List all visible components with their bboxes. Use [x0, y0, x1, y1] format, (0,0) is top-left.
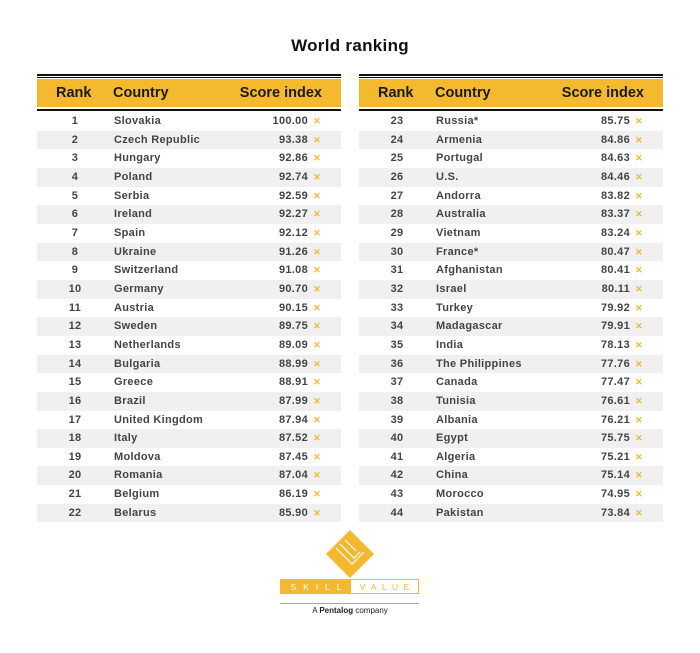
rows 23-44: 26	[391, 171, 403, 183]
rows 23-44: 84.46	[601, 171, 630, 183]
rows 23-44: Australia	[436, 208, 486, 220]
rows 1-22: Moldova	[114, 451, 161, 463]
rows 23-44: 75.21	[601, 451, 630, 463]
rows 1-22: Czech Republic	[114, 134, 200, 146]
panel: left ranking table	[37, 74, 341, 522]
rows 23-44: 79.91	[601, 320, 630, 332]
rows 1-22: ✕	[313, 303, 321, 313]
rows 23-44: 40	[391, 432, 403, 444]
rows 1-22: 13	[69, 339, 81, 351]
rows 23-44: 76.21	[601, 414, 630, 426]
rows 23-44: ✕	[635, 228, 643, 238]
rows 23-44: ✕	[635, 172, 643, 182]
rows 1-22: 20	[69, 469, 81, 481]
rows 23-44: Armenia	[436, 134, 482, 146]
table header	[359, 79, 663, 107]
wordmark bar	[280, 579, 419, 594]
rows 1-22: 86.19	[279, 488, 308, 500]
rows 1-22: ✕	[313, 489, 321, 499]
rows 1-22: ✕	[313, 247, 321, 257]
rows 23-44: 84.86	[601, 134, 630, 146]
rows 23-44: Morocco	[436, 488, 484, 500]
rows 23-44: 42	[391, 469, 403, 481]
rows 23-44: 80.11	[602, 283, 630, 295]
rows 1-22: ✕	[313, 284, 321, 294]
rows 1-22: United Kingdom	[114, 414, 203, 426]
rows 1-22: Switzerland	[114, 264, 178, 276]
rows 1-22: 89.09	[279, 339, 308, 351]
table header: Rank	[56, 85, 91, 101]
rows 23-44: India	[436, 339, 463, 351]
rows 23-44: Canada	[436, 376, 478, 388]
wordmark bar: L	[382, 582, 387, 592]
rows 23-44: ✕	[635, 396, 643, 406]
rows 1-22: ✕	[313, 433, 321, 443]
rows 1-22: ✕	[313, 508, 321, 518]
wordmark bar: L	[337, 582, 341, 592]
rows 1-22: 21	[69, 488, 81, 500]
rows 23-44: 41	[391, 451, 403, 463]
rows 1-22	[37, 115, 341, 522]
rows 1-22: Ukraine	[114, 246, 156, 258]
rows 23-44: 77.76	[601, 358, 630, 370]
rows 1-22: ✕	[313, 265, 321, 275]
rows 1-22: ✕	[313, 172, 321, 182]
rows 23-44: 25	[391, 152, 403, 164]
rows 23-44: ✕	[635, 359, 643, 369]
rows 23-44: ✕	[635, 284, 643, 294]
rows 1-22: 88.99	[279, 358, 308, 370]
rows 1-22: Belarus	[114, 507, 156, 519]
rows 23-44: Algeria	[436, 451, 475, 463]
rows 23-44: 84.63	[601, 152, 630, 164]
rows 23-44: ✕	[635, 116, 643, 126]
wordmark bar: L	[325, 582, 330, 592]
rows 1-22: ✕	[313, 470, 321, 480]
rows 23-44: ✕	[635, 470, 643, 480]
rows 23-44: ✕	[635, 433, 643, 443]
rows 1-22: 90.15	[279, 302, 308, 314]
rows 1-22: Ireland	[114, 208, 152, 220]
rows 23-44: France*	[436, 246, 478, 258]
rows 1-22: 90.70	[279, 283, 308, 295]
rows 23-44: Albania	[436, 414, 478, 426]
rows 23-44: ✕	[635, 452, 643, 462]
rows 23-44: 83.24	[601, 227, 630, 239]
rows 23-44: 37	[391, 376, 403, 388]
rows 23-44: 27	[391, 190, 403, 202]
rows 1-22: ✕	[313, 414, 321, 424]
rows 1-22: 22	[69, 507, 81, 519]
wordmark bar: A	[371, 582, 376, 592]
rows 1-22: 5	[72, 190, 78, 202]
table header	[37, 79, 341, 107]
rows 23-44: Vietnam	[436, 227, 481, 239]
rows 23-44: ✕	[635, 135, 643, 145]
rows 23-44: ✕	[635, 377, 643, 387]
rows 23-44: 83.37	[601, 208, 630, 220]
rows 1-22: 92.86	[279, 152, 308, 164]
rows 23-44: 29	[391, 227, 403, 239]
rows 1-22: Brazil	[114, 395, 146, 407]
rows 1-22: Romania	[114, 469, 163, 481]
rows 1-22: Greece	[114, 376, 153, 388]
rows 23-44: 39	[391, 414, 403, 426]
table header: Country	[113, 85, 169, 101]
rows 1-22: Italy	[114, 432, 138, 444]
wordmark bar: I	[316, 582, 318, 592]
rows 23-44: ✕	[635, 265, 643, 275]
rows 1-22: 18	[69, 432, 81, 444]
rows 1-22: 8	[72, 246, 78, 258]
rows 1-22: 85.90	[279, 507, 308, 519]
rows 1-22: 6	[72, 208, 78, 220]
rows 1-22: ✕	[313, 396, 321, 406]
rows 1-22: Serbia	[114, 190, 149, 202]
rows 1-22: 4	[72, 171, 78, 183]
rows 1-22: 87.99	[279, 395, 308, 407]
rows 1-22: 2	[72, 134, 78, 146]
rows 23-44: 32	[391, 283, 403, 295]
rows 1-22: ✕	[313, 452, 321, 462]
rows 23-44: 78.13	[601, 339, 630, 351]
rows 1-22: 12	[69, 320, 81, 332]
rows 1-22: 91.26	[279, 246, 308, 258]
rows 23-44: Russia*	[436, 115, 478, 127]
rows 1-22: 92.12	[279, 227, 308, 239]
rows 23-44: U.S.	[436, 171, 459, 183]
rows 23-44: Turkey	[436, 302, 473, 314]
rows 23-44: Tunisia	[436, 395, 476, 407]
rows 1-22: ✕	[313, 321, 321, 331]
rows 1-22: Slovakia	[114, 115, 161, 127]
rows 1-22: 92.27	[279, 208, 308, 220]
rows 1-22: Germany	[114, 283, 164, 295]
rows 23-44: 30	[391, 246, 403, 258]
rows 23-44: ✕	[635, 321, 643, 331]
rows 1-22: 11	[69, 302, 81, 314]
rows 1-22: 19	[69, 451, 81, 463]
rows 1-22: ✕	[313, 153, 321, 163]
panel: right ranking table	[359, 74, 663, 522]
rows 23-44: 28	[391, 208, 403, 220]
rows 23-44: ✕	[635, 153, 643, 163]
rows 23-44: Egypt	[436, 432, 468, 444]
rows 23-44: ✕	[635, 414, 643, 424]
rows 1-22: 14	[69, 358, 81, 370]
rows 23-44: ✕	[635, 209, 643, 219]
rows 1-22: ✕	[313, 377, 321, 387]
rows 23-44: The Philippines	[436, 358, 522, 370]
rows 23-44: 74.95	[601, 488, 630, 500]
rows 23-44: 44	[391, 507, 403, 519]
logo: SkillValue	[280, 530, 419, 615]
rows 23-44: 33	[391, 302, 403, 314]
rows 23-44: 38	[391, 395, 403, 407]
rows 23-44: ✕	[635, 247, 643, 257]
wordmark bar: S	[290, 582, 296, 592]
wordmark bar: V	[360, 582, 365, 592]
table header: Score index	[240, 85, 322, 101]
rows 1-22: 87.04	[279, 469, 308, 481]
rows 1-22: 9	[72, 264, 78, 276]
rows 23-44: Andorra	[436, 190, 481, 202]
rows 1-22: ✕	[313, 116, 321, 126]
title: World ranking	[291, 36, 409, 55]
rows 23-44	[359, 115, 663, 522]
rows 1-22: 87.94	[279, 414, 308, 426]
rows 23-44: 79.92	[601, 302, 630, 314]
rows 23-44: 77.47	[601, 376, 630, 388]
rows 23-44: ✕	[635, 340, 643, 350]
rows 23-44: 83.82	[601, 190, 630, 202]
rows 1-22: 7	[72, 227, 78, 239]
wordmark bar: K	[303, 582, 309, 592]
rows 1-22: 91.08	[279, 264, 308, 276]
wordmark bar: U	[392, 582, 398, 592]
rows 23-44: 80.41	[601, 264, 630, 276]
rows 23-44: 75.14	[601, 469, 630, 481]
rows 23-44: 31	[391, 264, 403, 276]
rows 1-22: ✕	[313, 191, 321, 201]
rows 1-22: 87.45	[279, 451, 308, 463]
table header: Rank	[378, 85, 413, 101]
rows 23-44: ✕	[635, 303, 643, 313]
rows 1-22: ✕	[313, 228, 321, 238]
rows 23-44: Israel	[436, 283, 467, 295]
rows 23-44: 80.47	[601, 246, 630, 258]
rows 1-22: 92.59	[279, 190, 308, 202]
rows 1-22: 100.00	[273, 115, 308, 127]
rows 1-22: 3	[72, 152, 78, 164]
rows 23-44: 23	[391, 115, 403, 127]
rows 23-44: 76.61	[601, 395, 630, 407]
rows 23-44: Portugal	[436, 152, 483, 164]
rows 23-44: Pakistan	[436, 507, 484, 519]
rows 23-44: 24	[391, 134, 403, 146]
rows 1-22: 87.52	[279, 432, 308, 444]
rows 1-22: 92.74	[279, 171, 308, 183]
rows 1-22: ✕	[313, 209, 321, 219]
rows 1-22: Spain	[114, 227, 145, 239]
rows 23-44: 35	[391, 339, 403, 351]
rows 23-44: 34	[391, 320, 403, 332]
rows 1-22: 17	[69, 414, 81, 426]
rows 1-22: Netherlands	[114, 339, 181, 351]
rows 1-22: ✕	[313, 359, 321, 369]
rows 1-22: Sweden	[114, 320, 157, 332]
rows 23-44: 36	[391, 358, 403, 370]
rows 1-22: Hungary	[114, 152, 161, 164]
rows 23-44: Madagascar	[436, 320, 503, 332]
rows 23-44: ✕	[635, 508, 643, 518]
tagline: A Pentalog company	[312, 606, 388, 615]
rows 23-44: ✕	[635, 489, 643, 499]
rows 23-44: China	[436, 469, 468, 481]
rows 1-22: Austria	[114, 302, 154, 314]
rows 1-22: ✕	[313, 340, 321, 350]
rows 1-22: 88.91	[279, 376, 308, 388]
icon: diamond	[326, 530, 374, 578]
rows 1-22: 89.75	[279, 320, 308, 332]
rows 1-22: 93.38	[279, 134, 308, 146]
rows 23-44: Afghanistan	[436, 264, 503, 276]
rows 23-44: 43	[391, 488, 403, 500]
rows 1-22: 15	[69, 376, 81, 388]
rows 1-22: 16	[69, 395, 81, 407]
rows 23-44: ✕	[635, 191, 643, 201]
rows 23-44: 73.84	[601, 507, 630, 519]
rows 1-22: 10	[69, 283, 81, 295]
rows 1-22: Belgium	[114, 488, 160, 500]
rows 23-44: 85.75	[601, 115, 630, 127]
rows 1-22: ✕	[313, 135, 321, 145]
wordmark bar: E	[404, 582, 409, 592]
table header: Country	[435, 85, 491, 101]
rows 1-22: Bulgaria	[114, 358, 160, 370]
table header: Score index	[562, 85, 644, 101]
rows 23-44: 75.75	[601, 432, 630, 444]
rows 1-22: Poland	[114, 171, 152, 183]
rows 1-22: 1	[72, 115, 78, 127]
